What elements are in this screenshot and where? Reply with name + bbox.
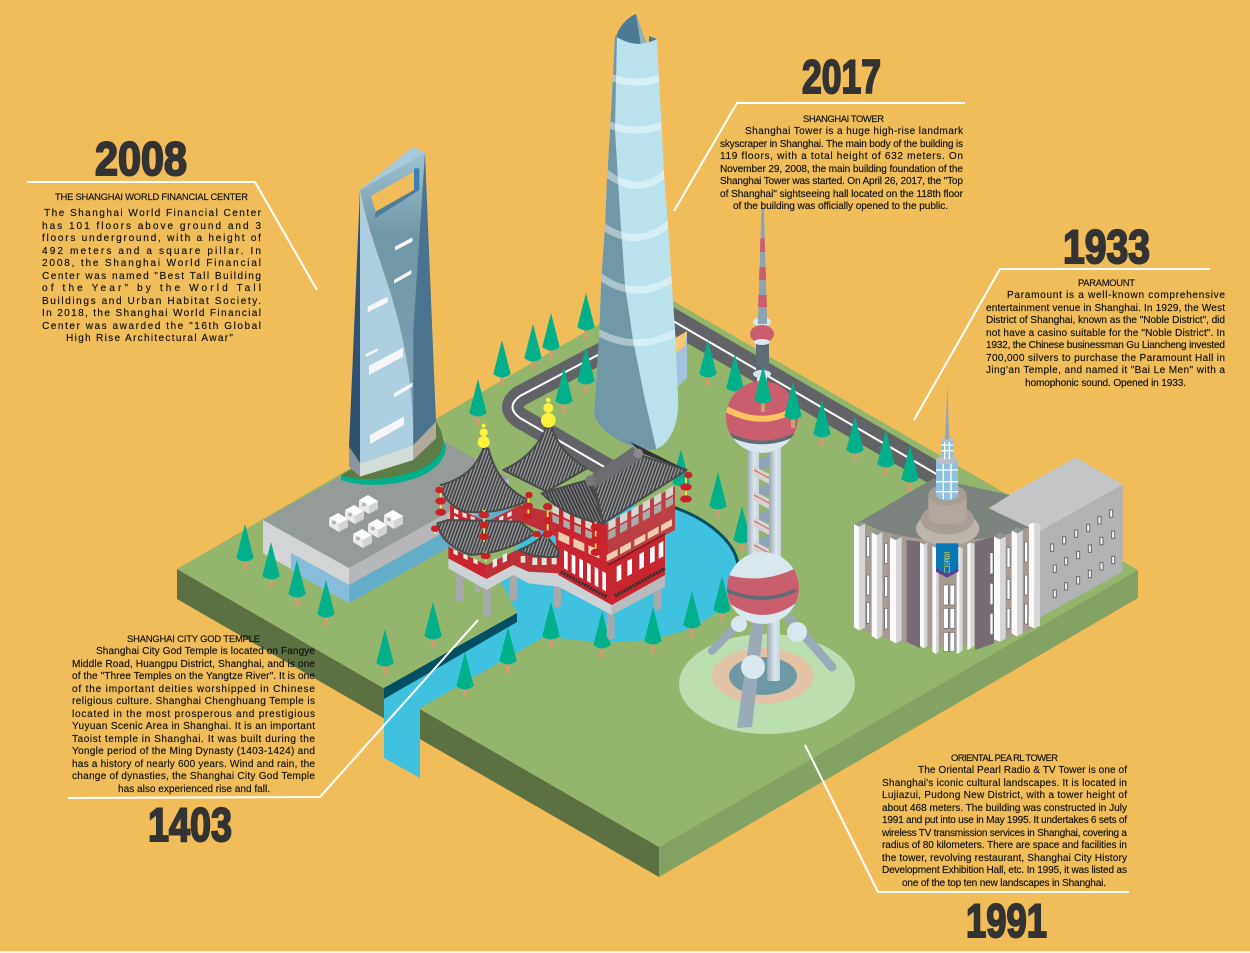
callout: 1991 Oriental Pearl Tower: Lujiazui, Pudong New District, with a tower height of bbox=[882, 790, 1127, 801]
callout: 2008 Shanghai World Financial Center bbox=[27, 132, 317, 344]
platform bbox=[448, 558, 665, 615]
callout: 1403 Shanghai City God Temple: 1403 bbox=[148, 798, 232, 851]
callout: 2008 Shanghai World Financial Center: floors underground, with a height of bbox=[42, 233, 261, 244]
callout: 1991 Oriental Pearl Tower: one of the top ten new landscapes in Shanghai. bbox=[902, 878, 1106, 889]
callout: 2008 Shanghai World Financial Center: Buildings and Urban Habitat Society. bbox=[42, 296, 261, 307]
columns bbox=[854, 521, 1040, 654]
callout: 1403 Shanghai City God Temple: has also experienced rise and fall. bbox=[118, 784, 270, 795]
temple roofs bbox=[437, 427, 687, 557]
callout: 1933 Paramount: Paramount is a well-known comprehensive bbox=[1007, 290, 1225, 301]
callout: 2008 Shanghai World Financial Center: of the Year" by the World Tall bbox=[42, 283, 261, 294]
river and pond bbox=[384, 505, 738, 778]
callout: 1403 Shanghai City God Temple: religious culture. Shanghai Chenghuang Temple is bbox=[72, 696, 315, 707]
callout: 1403 Shanghai City God Temple: change of dynasties, the Shanghai City God Temple bbox=[72, 771, 315, 782]
fan roof bbox=[860, 478, 1035, 542]
callout: 1991 Oriental Pearl Tower: radius of 80 kilometers. There are space and facilities in bbox=[882, 840, 1127, 851]
callout: 2008 Shanghai World Financial Center: Center was awarded the "16th Global bbox=[42, 321, 261, 332]
lower legs bbox=[712, 616, 832, 728]
building: Shanghai World Financial Center bbox=[341, 147, 446, 485]
banner: 乐 bbox=[943, 558, 950, 567]
callout: 1991 Oriental Pearl Tower: Development Exhibition Hall, etc. In 1995, it was listed as bbox=[882, 865, 1127, 876]
plaza with green base bbox=[263, 430, 509, 603]
callout: 2008 Shanghai World Financial Center: The Shanghai World Financial Center bbox=[44, 208, 262, 219]
curved wall bbox=[857, 524, 1037, 652]
callout: 1933 Paramount bbox=[914, 220, 1225, 420]
callout: 1991 Oriental Pearl Tower: wireless TV transmission services in Shanghai, covering a bbox=[881, 828, 1127, 839]
callout: 1991 Oriental Pearl Tower: The Oriental Pearl Radio & TV Tower is one of bbox=[918, 765, 1127, 776]
lanterns bbox=[431, 472, 692, 562]
callout: 1403 Shanghai City God Temple: Yuyuan Scenic Area in Shanghai. It is an important bbox=[72, 721, 315, 732]
isometric ground platform bbox=[177, 291, 1138, 877]
callout: 1933 Paramount: District of Shanghai, known as the "Noble District", did bbox=[986, 315, 1225, 326]
callout: 1403 Shanghai City God Temple: SHANGHAI CITY GOD TEMPLE bbox=[127, 633, 260, 644]
callout: 1933 Paramount: PARAMOUNT bbox=[1078, 277, 1135, 288]
callout: 2008 Shanghai World Financial Center: 2008 bbox=[95, 132, 187, 185]
building: Paramount bbox=[854, 386, 1123, 654]
callout: 1403 Shanghai City God Temple: Middle Road, Huangpu District, Shanghai, and is one bbox=[72, 659, 315, 670]
callout: 2017 Shanghai Tower: November 29, 2008, the main building foundation of the bbox=[720, 164, 963, 175]
callout: 2017 Shanghai Tower: skyscraper in Shanghai. The main body of the building is bbox=[720, 139, 963, 150]
trees in front of tower bbox=[376, 366, 802, 698]
building: City God Temple bbox=[431, 398, 692, 636]
callout: 2017 Shanghai Tower bbox=[674, 50, 965, 212]
callout: 1991 Oriental Pearl Tower: about 468 meters. The building was constructed in July bbox=[882, 803, 1128, 814]
callout: 2008 Shanghai World Financial Center: THE SHANGHAI WORLD FINANCIAL CENTER bbox=[55, 191, 248, 202]
callout: 2008 Shanghai World Financial Center: has 101 floors above ground and 3 bbox=[42, 221, 261, 232]
callout: 2017 Shanghai Tower: Shanghai Tower is a huge high-rise landmark bbox=[745, 126, 964, 137]
callout: 1403 Shanghai City God Temple: of the important deities worshipped in Chinese bbox=[72, 684, 315, 695]
callout: 1991 Oriental Pearl Tower: the tower, revolving restaurant, Shanghai City History bbox=[882, 853, 1128, 864]
callout: 1991 Oriental Pearl Tower: 1991 bbox=[966, 894, 1047, 947]
walls bbox=[448, 487, 675, 605]
rear block bbox=[988, 457, 1123, 627]
callout: 1933 Paramount: Jing'an Temple, and named it "Bai Le Men" with a bbox=[986, 365, 1225, 376]
road bbox=[512, 318, 945, 479]
callout: 1933 Paramount: 700,000 silvers to purchase the Paramount Hall in bbox=[986, 353, 1225, 364]
callout: 1403 Shanghai City God Temple: of the "Three Temples on the Yangtze River". It is one bbox=[72, 671, 315, 682]
callout: 2008 Shanghai World Financial Center: 2008, the Shanghai World Financial bbox=[42, 258, 261, 269]
callout: 2017 Shanghai Tower: 119 floors, with a total height of 632 meters. On bbox=[720, 151, 963, 162]
callout: 1991 Oriental Pearl Tower: Shanghai's iconic cultural landscapes. It is located in bbox=[882, 778, 1127, 789]
building: Oriental Pearl Tower bbox=[679, 208, 855, 734]
callout: 1933 Paramount: 1933 bbox=[1063, 220, 1150, 273]
callout: 1403 Shanghai City God Temple: Yongle period of the Ming Dynasty (1403-1424) and bbox=[72, 746, 315, 757]
temple windows bbox=[453, 486, 673, 597]
callout: 2008 Shanghai World Financial Center: 492 meters and a square pillar. In bbox=[42, 246, 261, 257]
callout: 1403 Shanghai City God Temple bbox=[68, 620, 478, 851]
callout: 1403 Shanghai City God Temple: Taoist temple in Shanghai. It was built during the bbox=[72, 734, 315, 745]
callout: 2017 Shanghai Tower: 2017 bbox=[802, 50, 881, 103]
callout: 1403 Shanghai City God Temple: Shanghai City God Temple is located on Fangye bbox=[96, 646, 315, 657]
callout: 1403 Shanghai City God Temple: has a history of nearly 600 years. Wind and rain, the bbox=[72, 759, 315, 770]
callout: 1991 Oriental Pearl Tower: ORIENTAL PEA RL TOWER bbox=[951, 752, 1058, 763]
callout: 1933 Paramount: homophonic sound. Opened in 1933. bbox=[1025, 378, 1186, 389]
callout: 1933 Paramount: entertainment venue in Shanghai. In 1929, the West bbox=[986, 303, 1225, 314]
callout: 2017 Shanghai Tower: Shanghai Tower was started. On April 26, 2017, the "Top bbox=[720, 176, 963, 187]
callout: 2008 Shanghai World Financial Center: In 2018, the Shanghai World Financial bbox=[42, 308, 261, 319]
rooftop boxes bbox=[329, 495, 403, 548]
dome and spire bbox=[916, 386, 979, 546]
stilts bbox=[460, 570, 658, 636]
gourds bbox=[478, 398, 556, 448]
callout: 2008 Shanghai World Financial Center: Center was named "Best Tall Building bbox=[42, 271, 261, 282]
callout: 2017 Shanghai Tower: of Shanghai" sightseeing hall located on the 118th floor bbox=[720, 189, 964, 200]
spire bbox=[750, 208, 774, 386]
callout: 1933 Paramount: 1932, the Chinese businessman Gu Liancheng invested bbox=[986, 340, 1225, 351]
base rings bbox=[679, 634, 855, 734]
banner: 百 bbox=[943, 552, 950, 560]
lower sphere bbox=[725, 550, 800, 625]
banner: 门 bbox=[943, 564, 950, 573]
building: Shanghai Tower bbox=[594, 14, 678, 450]
temple ridge bbox=[585, 442, 687, 487]
callout: 2017 Shanghai Tower: of the building was officially opened to the public. bbox=[733, 201, 948, 212]
columns bbox=[747, 445, 781, 575]
trees behind landmarks bbox=[236, 293, 919, 626]
callout: 1991 Oriental Pearl Tower bbox=[805, 745, 1129, 947]
callout: 1403 Shanghai City God Temple: located in the most prosperous and prestigious bbox=[72, 709, 315, 720]
upper sphere bbox=[726, 381, 798, 453]
small building behind Shanghai Tower bbox=[672, 331, 687, 392]
callout: 1991 Oriental Pearl Tower: 1991 and put into use in May 1995. It undertakes 6 sets of bbox=[882, 815, 1127, 826]
callout: 1933 Paramount: not have a casino suitable for the "Noble District". In bbox=[986, 328, 1225, 339]
callout: 2017 Shanghai Tower: SHANGHAI TOWER bbox=[803, 113, 884, 124]
banner bbox=[936, 543, 958, 578]
callout: 2008 Shanghai World Financial Center: High Rise Architectural Awar" bbox=[66, 333, 233, 344]
